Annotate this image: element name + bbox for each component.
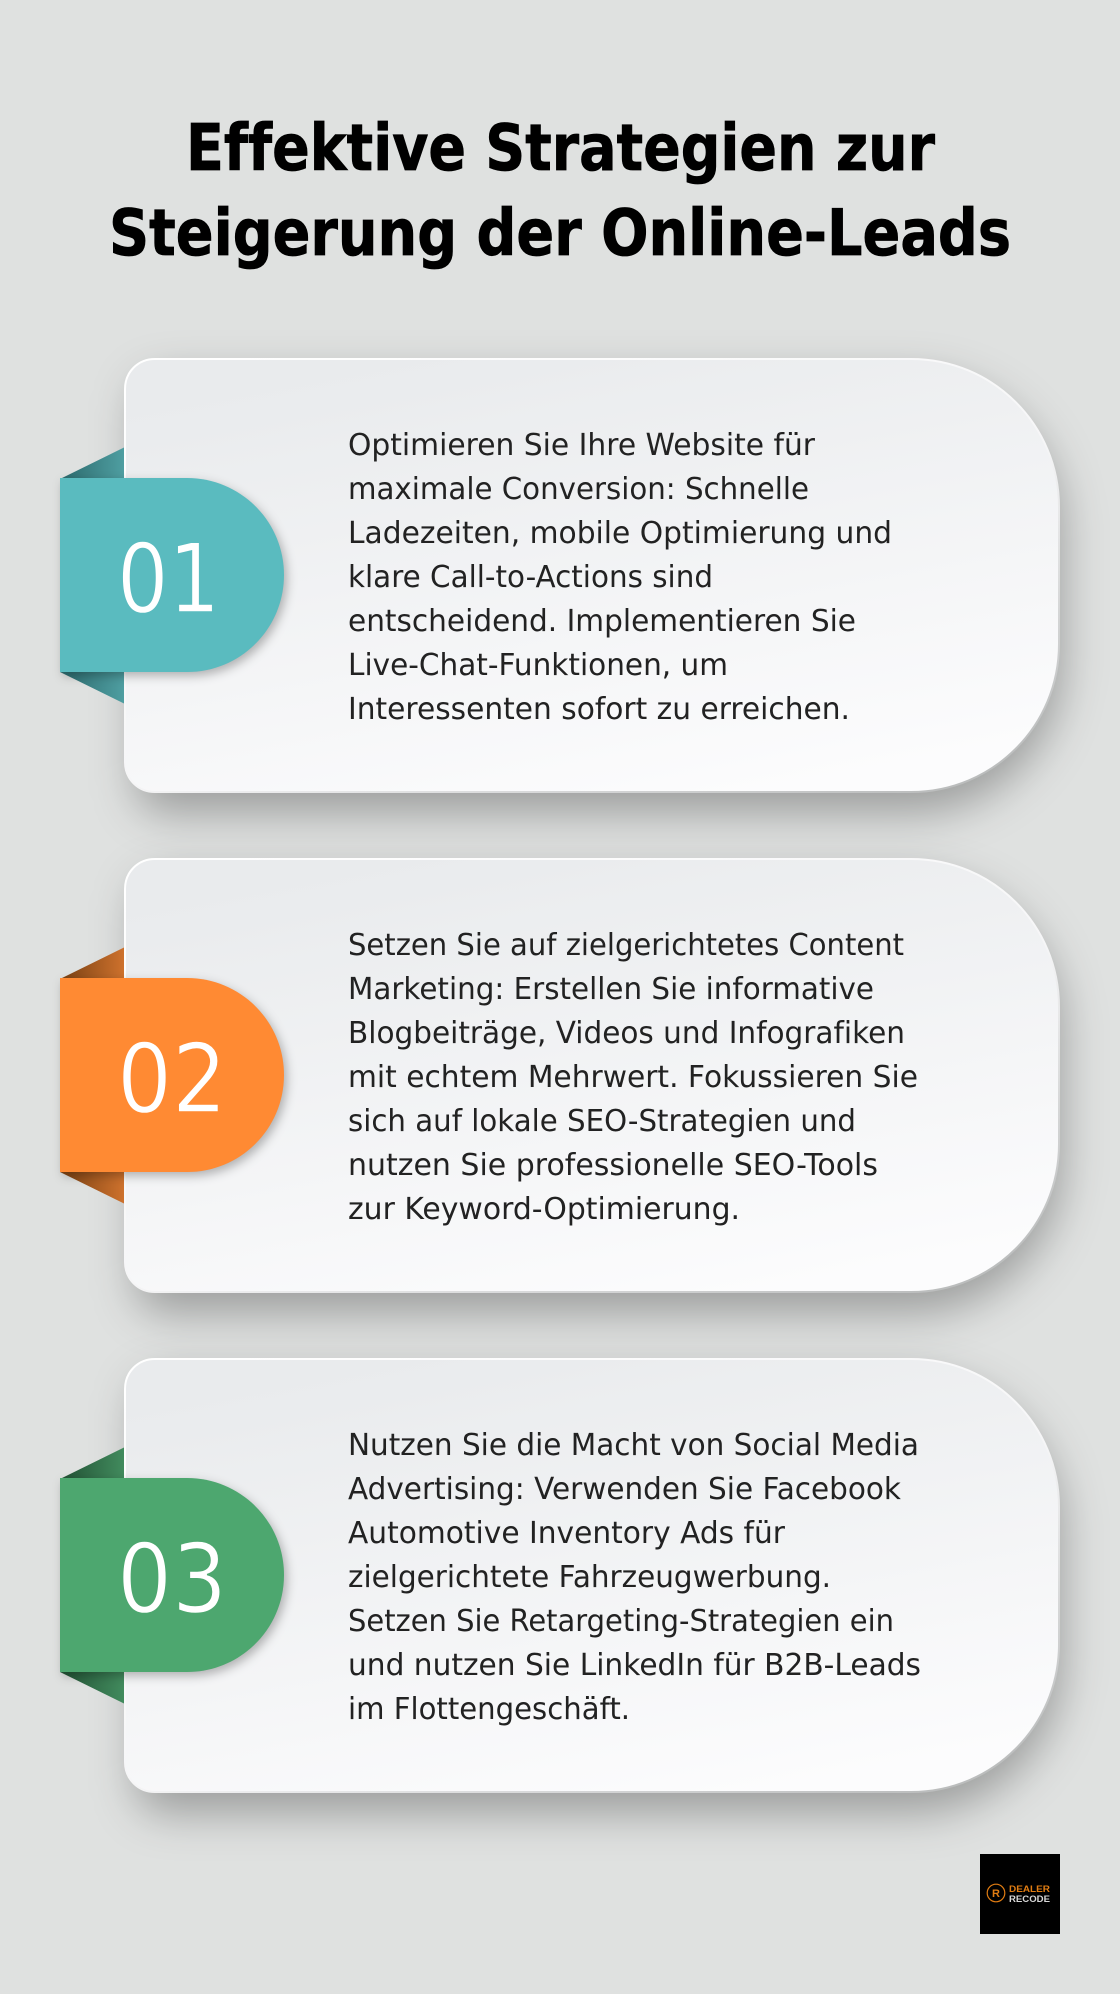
logo: Dealer Recode: RECODE (1009, 1894, 1050, 1905)
title: Effektive Strategien zur (186, 112, 935, 186)
text block 02: Marketing: Erstellen Sie informative (348, 972, 874, 1007)
badge 02 (60, 978, 287, 1176)
text block 01: maximale Conversion: Schnelle (348, 472, 809, 507)
title: Steigerung der Online-Leads (109, 197, 1011, 271)
logo: Dealer Recode: R (992, 1888, 1000, 1900)
text block 03: Nutzen Sie die Macht von Social Media (348, 1428, 919, 1463)
icon: ribbon fold bottom 03 (60, 1672, 125, 1704)
icon: ribbon fold top 01 (62, 447, 125, 478)
text block 03 (348, 1428, 921, 1727)
icon: ribbon fold top 02 (62, 947, 125, 978)
badge 01: 01 (117, 525, 220, 635)
logo: Dealer Recode: DEALER (1009, 1884, 1050, 1895)
icon: ribbon fold bottom 02 (60, 1172, 125, 1204)
text block 02: mit echtem Mehrwert. Fokussieren Sie (348, 1060, 918, 1095)
text block 03: im Flottengeschäft. (348, 1692, 630, 1727)
text block 01: entscheidend. Implementieren Sie (348, 604, 856, 639)
text block 03: zielgerichtete Fahrzeugwerbung. (348, 1560, 831, 1595)
text block 01: Ladezeiten, mobile Optimierung und (348, 516, 892, 551)
text block 02: Blogbeiträge, Videos und Infografiken (348, 1016, 905, 1051)
text block 03: Automotive Inventory Ads für (348, 1516, 785, 1551)
text block 02: Setzen Sie auf zielgerichtetes Content (348, 928, 904, 963)
text block 01 (348, 428, 892, 727)
panel: step 03 (60, 1359, 1062, 1813)
icon: ribbon fold top 03 (62, 1447, 125, 1478)
text block 03: Advertising: Verwenden Sie Facebook (348, 1472, 901, 1507)
text block 03: Setzen Sie Retargeting-Strategien ein (348, 1604, 894, 1639)
panel: step 01 (60, 359, 1062, 813)
card 03 (125, 1359, 1059, 1792)
text block 01: Optimieren Sie Ihre Website für (348, 428, 815, 463)
badge 02: 02 (117, 1025, 227, 1135)
badge 03: 03 (117, 1525, 227, 1635)
card 02 (125, 859, 1059, 1292)
badge 01 (60, 478, 287, 676)
text block 02: zur Keyword-Optimierung. (348, 1192, 740, 1227)
text block 01: Interessenten sofort zu erreichen. (348, 692, 850, 727)
icon: ribbon fold bottom 01 (60, 672, 125, 704)
text block 02: nutzen Sie professionelle SEO-Tools (348, 1148, 878, 1183)
text block 01: klare Call-to-Actions sind (348, 560, 713, 595)
badge 03 (60, 1478, 287, 1676)
text block 01: Live-Chat-Funktionen, um (348, 648, 728, 683)
text block 02 (348, 928, 918, 1227)
card 01 (125, 359, 1059, 792)
text block 03: und nutzen Sie LinkedIn für B2B-Leads (348, 1648, 921, 1683)
text block 02: sich auf lokale SEO-Strategien und (348, 1104, 856, 1139)
title (109, 112, 1011, 271)
logo: Dealer Recode (980, 1854, 1060, 1934)
panel: step 02 (60, 859, 1062, 1313)
